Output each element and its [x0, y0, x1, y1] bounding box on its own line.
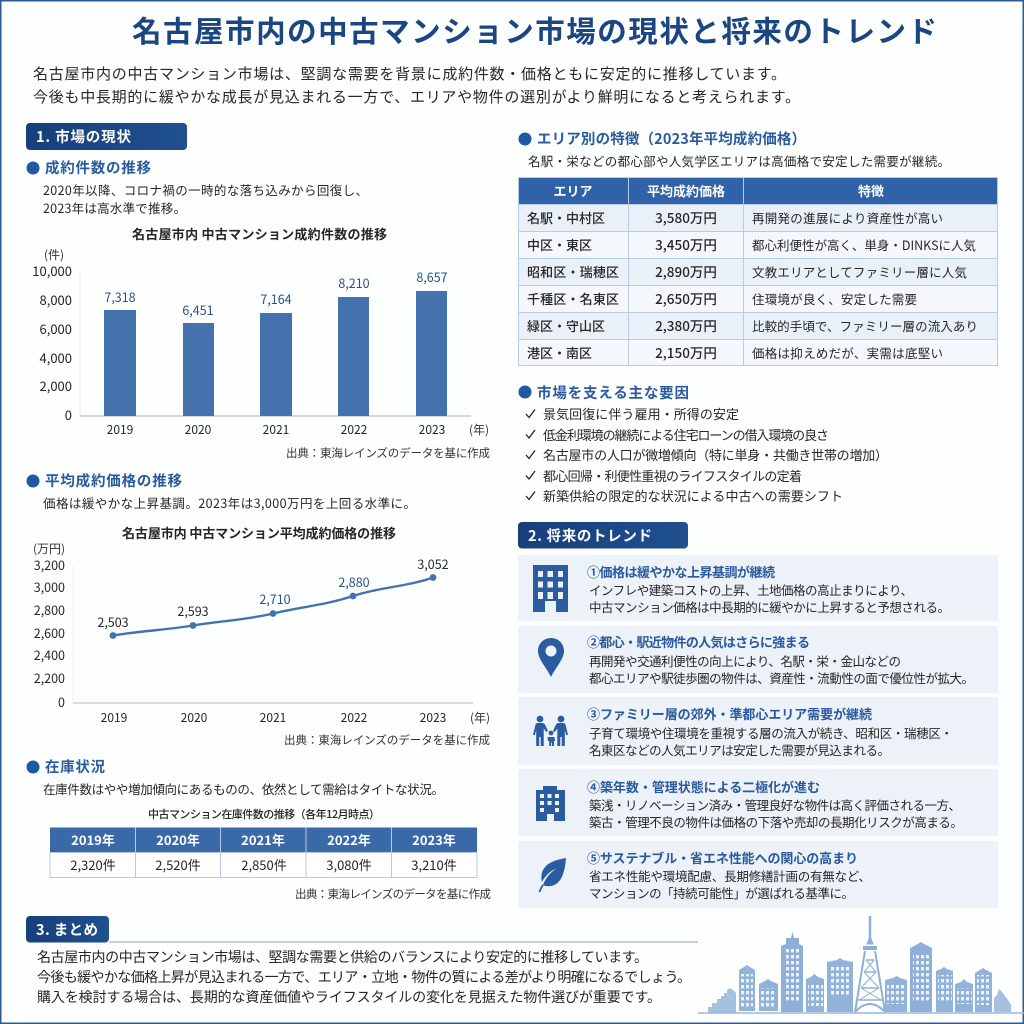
text: summary body: 名古屋市内の中古マンション市場は、堅調な需要と供給のバランスにより安定的に推移しています。: [37, 947, 648, 967]
table: area prices: 2,890万円: [655, 261, 717, 281]
card: trend 2: 再開発や交通利便性の向上により、名駅・栄・金山などの: [589, 651, 901, 670]
subheading: area characteristics: エリア別の特徴（2023年平均成約価格）: [537, 128, 806, 149]
subheading: average price: 平均成約価格の推移: [45, 470, 182, 491]
subheading: market factors: 市場を支える主な要因: [537, 382, 689, 403]
line chart: average price: 名古屋市内 中古マンション平均成約価格の推移: [122, 523, 396, 542]
panel: 2. future trends: [518, 522, 998, 908]
section heading: 2. future trends: 2. 将来のトレンド: [528, 525, 652, 546]
subheading: transactions: 成約件数の推移: [45, 157, 152, 178]
panel: 1. market status: [26, 123, 492, 902]
table: area prices: 名駅・中村区: [527, 208, 605, 227]
list: market factors: 新築供給の限定的な状況による中古への需要シフト: [543, 486, 843, 505]
line chart: average price: 0: [58, 692, 65, 711]
panel: market factors: [518, 382, 888, 505]
table: area prices: 2,150万円: [655, 342, 717, 362]
bar chart: transactions: [32, 224, 489, 438]
table: area prices: 文教エリアとしてファミリー層に人気: [752, 262, 967, 281]
table: area prices: 価格は抑えめだが、実需は底堅い: [752, 343, 943, 362]
table: area prices: 昭和区・瑞穂区: [527, 262, 619, 281]
table: area prices: 都心利便性が高く、単身・DINKSに人気: [752, 235, 976, 254]
table: area prices: 3,450万円: [655, 234, 717, 254]
list: market factors: 名古屋市の人口が微増傾向（特に単身・共働き世帯の増加）: [543, 445, 888, 464]
text: inventory table title: 中古マンション在庫件数の推移（各年12月時点）: [148, 806, 380, 822]
card: trend 3: 子育て環境や住環境を重視する層の流入が続き、昭和区・瑞穂区・: [589, 723, 953, 742]
table: inventory: 3,080件: [326, 855, 372, 874]
line chart: average price: 2,503: [97, 612, 129, 631]
line chart: average price: 2,593: [177, 601, 209, 620]
list: market factors: 低金利環境の継続による住宅ローンの借入環境の良さ: [543, 425, 829, 444]
line chart: average price: 2,710: [259, 589, 291, 608]
list: market factors: 都心回帰・利便性重視のライフスタイルの定着: [543, 466, 802, 485]
text: transactions description: 2020年以降、コロナ禍の一時的な落ち込みから回復し、: [43, 180, 368, 199]
text: price description: 価格は緩やかな上昇基調。2023年は3,000万円を上回る水準に。: [43, 493, 416, 512]
card: trend 2: [518, 626, 998, 693]
bar chart: transactions: 7,318: [104, 287, 136, 306]
line chart: average price: 2022: [341, 709, 368, 726]
line chart: average price: 2,600: [34, 623, 65, 642]
table: inventory: 2020年: [156, 830, 200, 849]
bar chart: transactions: (件): [44, 246, 64, 263]
card: trend 4: 築浅・リノベーション済み・管理良好な物件は高く評価される一方、: [589, 795, 961, 814]
line chart: average price: 2,400: [34, 645, 65, 664]
bar chart: transactions: 4,000: [40, 348, 72, 367]
list: market factors: 景気回復に伴う雇用・所得の安定: [543, 404, 739, 423]
card: trend 5: 省エネ性能や環境配慮、長期修繕計画の有無など、: [589, 866, 871, 885]
line chart: average price: 3,052: [417, 554, 449, 573]
intro text: 名古屋市内の中古マンション市場は、堅調な需要を背景に成約件数・価格ともに安定的に推移しています。: [33, 63, 786, 84]
panel: area characteristics: [518, 128, 998, 366]
text: summary body: 今後も緩やかな価格上昇が見込まれる一方で、エリア・立地・物件の質による差がより明確になるでしょう。: [37, 967, 691, 987]
line chart: average price: [33, 523, 490, 726]
card: trend 4: 築古・管理不良の物件は価格の下落や売却の長期化リスクが高まる。: [589, 812, 963, 831]
card: trend 3: ③ファミリー層の郊外・準都心エリア需要が継続: [587, 704, 872, 723]
table: inventory: 2023年: [412, 830, 456, 849]
icon: family: [533, 716, 568, 746]
icon: map pin: [538, 638, 564, 677]
table: area prices: 比較的手頃で、ファミリー層の流入あり: [752, 316, 978, 335]
section heading: 3. summary: [26, 916, 109, 942]
table: area prices: エリア: [553, 181, 593, 200]
table: area prices: 平均成約価格: [647, 181, 725, 200]
icon: apartment block: [536, 786, 565, 821]
table: area prices: 2,650万円: [655, 288, 717, 308]
text: summary body: 購入を検討する場合は、長期的な資産価値やライフスタイルの変化を見据えた物件選びが重要です。: [37, 987, 661, 1007]
line chart: average price: 2,200: [34, 668, 65, 687]
section heading: 1. market status: 1. 市場の現状: [36, 126, 132, 147]
table: inventory: 2,850件: [241, 855, 287, 874]
card: trend 1: ①価格は緩やかな上昇基調が継続: [587, 562, 775, 581]
icon: leaf: [540, 858, 566, 892]
text: transactions description: 2023年は高水準で推移。: [43, 198, 186, 217]
table: inventory: 2,320件: [70, 855, 116, 874]
table: area prices: 千種区・名東区: [527, 289, 619, 308]
bar chart: transactions: 8,210: [338, 273, 370, 292]
table: inventory: 2,520件: [155, 855, 201, 874]
bar chart: transactions: 10,000: [32, 261, 72, 280]
bar chart: transactions: 8,657: [416, 267, 448, 286]
source note: 出典：東海レインズのデータを基に作成: [286, 445, 490, 461]
card: trend 2: 都心エリアや駅徒歩圏の物件は、資産性・流動性の面で優位性が拡大。: [589, 668, 974, 687]
text: inventory description: 在庫件数はやや増加傾向にあるものの、依然として需給はタイトな状況。: [43, 779, 444, 798]
line chart: average price: 3,200: [34, 555, 65, 574]
bar chart: transactions: 8,000: [40, 290, 72, 309]
table: inventory: 3,210件: [411, 855, 457, 874]
bar chart: transactions: 2,000: [40, 376, 72, 395]
bar chart: transactions: 0: [65, 405, 72, 424]
line chart: average price: 2019: [101, 709, 127, 726]
card: trend 1: [518, 555, 998, 621]
intro text: 今後も中長期的に緩やかな成長が見込まれる一方で、エリアや物件の選別がより鮮明になると考えられます。: [33, 86, 800, 107]
bar chart: transactions: 2023: [419, 421, 445, 438]
table: area prices: 港区・南区: [527, 343, 592, 362]
section heading: 1. market status: [26, 123, 187, 150]
intro text: [33, 63, 800, 107]
line chart: average price: 2,800: [34, 600, 65, 619]
panel: 3. summary: [26, 916, 698, 1007]
card: trend 3: [518, 697, 998, 765]
bar chart: transactions: 2020: [185, 421, 212, 438]
section heading: 2. future trends: [518, 522, 688, 548]
line chart: average price: 2020: [181, 709, 208, 726]
line chart: average price: 2023: [420, 709, 446, 726]
illustration: city skyline with tower: [698, 916, 1024, 1013]
source note: 出典：東海レインズのデータを基に作成: [284, 732, 490, 748]
source note: 出典：東海レインズのデータを基に作成: [295, 886, 492, 902]
table: inventory: 2022年: [327, 830, 371, 849]
table: area prices: 3,580万円: [655, 207, 717, 227]
card: trend 5: マンションの「持続可能性」が選ばれる基準に。: [589, 883, 854, 902]
line chart: average price: 2021: [260, 709, 286, 726]
subheading: inventory: 在庫状況: [45, 756, 106, 777]
card: trend 1: インフレや建築コストの上昇、土地価格の高止まりにより、: [589, 580, 913, 599]
bar chart: transactions: 2022: [341, 421, 368, 438]
card: trend 5: [518, 841, 998, 908]
bar chart: transactions: (年): [469, 421, 489, 438]
table: area prices: 特徴: [858, 181, 884, 200]
card: trend 3: 名東区などの人気エリアは安定した需要が見込まれる。: [589, 740, 890, 759]
card: trend 5: ⑤サステナブル・省エネ性能への関心の高まり: [587, 848, 858, 867]
bar chart: transactions: 6,000: [40, 319, 72, 338]
text: area description: 名駅・栄などの都心部や人気学区エリアは高価格で安定した需要が継続。: [528, 151, 950, 170]
title: 名古屋市内の中古マンション市場の現状と将来のトレンド: [132, 9, 937, 51]
card: trend 4: ④築年数・管理状態による二極化が進む: [587, 777, 820, 796]
table: area prices: [518, 177, 998, 366]
table: inventory: [50, 828, 477, 878]
table: area prices: 2,380万円: [655, 315, 717, 335]
table: area prices: 住環境が良く、安定した需要: [752, 289, 917, 308]
bar chart: transactions: 7,164: [260, 289, 292, 308]
table: area prices: 中区・東区: [527, 235, 592, 254]
bar chart: transactions: 名古屋市内 中古マンション成約件数の推移: [132, 224, 387, 243]
text: transactions description: [43, 180, 368, 217]
section heading: 3. summary: 3. まとめ: [36, 919, 98, 940]
table: inventory: 2021年: [241, 830, 285, 849]
table: area prices: 再開発の進展により資産性が高い: [752, 208, 943, 227]
icon: office building: [533, 565, 568, 612]
table: area prices: 緑区・守山区: [527, 316, 605, 335]
card: trend 4: [518, 769, 998, 836]
table: inventory: 2019年: [71, 830, 115, 849]
card: trend 1: 中古マンション価格は中長期的に緩やかに上昇すると予想される。: [589, 597, 950, 616]
line chart: average price: (年): [470, 709, 490, 726]
card: trend 2: ②都心・駅近物件の人気はさらに強まる: [587, 632, 810, 651]
list: market factors: [526, 404, 888, 505]
bar chart: transactions: 2019: [107, 421, 133, 438]
line chart: average price: 3,000: [34, 577, 65, 596]
bar chart: transactions: 2021: [263, 421, 289, 438]
bar chart: transactions: 6,451: [182, 300, 214, 319]
line chart: average price: 2,880: [338, 572, 370, 591]
line chart: average price: (万円): [33, 540, 65, 557]
text: summary body: [37, 947, 691, 1007]
